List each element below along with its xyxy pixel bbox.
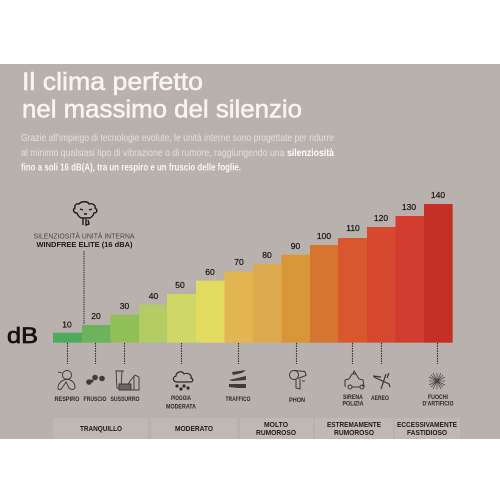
callout: indoor unit noise (34, 232, 135, 249)
callout: indoor unit noise: WINDFREE ELITE (16 dBA) (36, 240, 133, 249)
icon labels: SUSSURRO (110, 397, 140, 403)
icon: airplane (373, 373, 390, 389)
icon labels: PHON (289, 398, 305, 404)
category labels: TRANQUILLO (80, 424, 122, 433)
bar value labels: 130 (402, 202, 416, 212)
icon labels: POLIZIA (342, 402, 364, 408)
category labels: FASTIDIOSO (407, 428, 447, 437)
intro text (21, 133, 334, 174)
category labels (80, 420, 457, 437)
icon labels: AEREO (371, 396, 389, 402)
icon: traffic (229, 370, 246, 388)
title: nel massimo del silenzio (22, 96, 302, 124)
bar value labels (62, 190, 445, 330)
bar value labels: 80 (262, 250, 272, 260)
icon: fireworks (429, 373, 445, 389)
icon labels: D’ARTIFICIO (422, 402, 454, 408)
dotted leaders (68, 343, 438, 364)
icon labels: FRUSCIO (84, 397, 107, 403)
category labels: ECCESSIVAMENTE (397, 420, 457, 429)
icon: respiro (58, 370, 75, 390)
icon labels (54, 395, 454, 410)
callout: indoor unit noise: SILENZIOSITÀ UNITÀ INTERNA (34, 232, 135, 240)
bar value labels: 120 (374, 213, 388, 223)
category labels: RUMOROSO (256, 428, 296, 437)
intro text: fino a soli 16 dB(A), tra un respiro e un fruscio delle foglie. (21, 162, 241, 174)
bar value labels: 20 (91, 311, 101, 321)
category labels: ESTREMAMENTE (327, 420, 381, 429)
icon labels: SIRENA (343, 395, 364, 401)
bar value labels: 100 (317, 231, 331, 241)
bar value labels: 30 (120, 301, 129, 311)
bar value labels: 40 (149, 291, 158, 301)
bar value labels: 140 (431, 190, 445, 200)
intro text: al minimo qualsiasi tipo di vibrazione o di rumore, raggiungendo una silenziosità (21, 148, 334, 159)
axis unit label: dB (7, 323, 38, 348)
intro text: Grazie all’impiego di tecnologie evolute, le unità interne sono progettate per ridurre (21, 133, 334, 144)
callout leader line (83, 251, 85, 324)
icon: sussurro (116, 371, 139, 390)
bar value labels: 70 (234, 257, 244, 267)
icon: silent face (74, 202, 97, 225)
category labels: MODERATO (175, 424, 213, 433)
icon labels: TRAFFICO (226, 397, 251, 403)
icon: police car (345, 371, 364, 389)
bar value labels: 110 (346, 223, 360, 233)
bar value labels: 60 (205, 267, 215, 277)
bar value labels: 50 (175, 280, 185, 290)
background panel (0, 64, 500, 439)
bar value labels: 10 (62, 320, 72, 330)
icon: fruscio leaves (86, 375, 105, 385)
bar chart (53, 204, 453, 343)
icon: rain cloud (173, 372, 193, 390)
icon labels: FUOCHI (428, 395, 448, 401)
icon labels: RESPIRO (54, 397, 80, 403)
title (22, 68, 302, 124)
category labels: MOLTO (264, 420, 288, 429)
icon labels: MODERATA (166, 404, 197, 410)
category bands (53, 418, 460, 439)
bar value labels: 90 (291, 241, 300, 251)
icon labels: PIOGGIA (171, 396, 192, 402)
category labels: RUMOROSO (334, 428, 374, 437)
title: Il clima perfetto (22, 68, 203, 96)
icon: hair dryer (290, 370, 306, 389)
